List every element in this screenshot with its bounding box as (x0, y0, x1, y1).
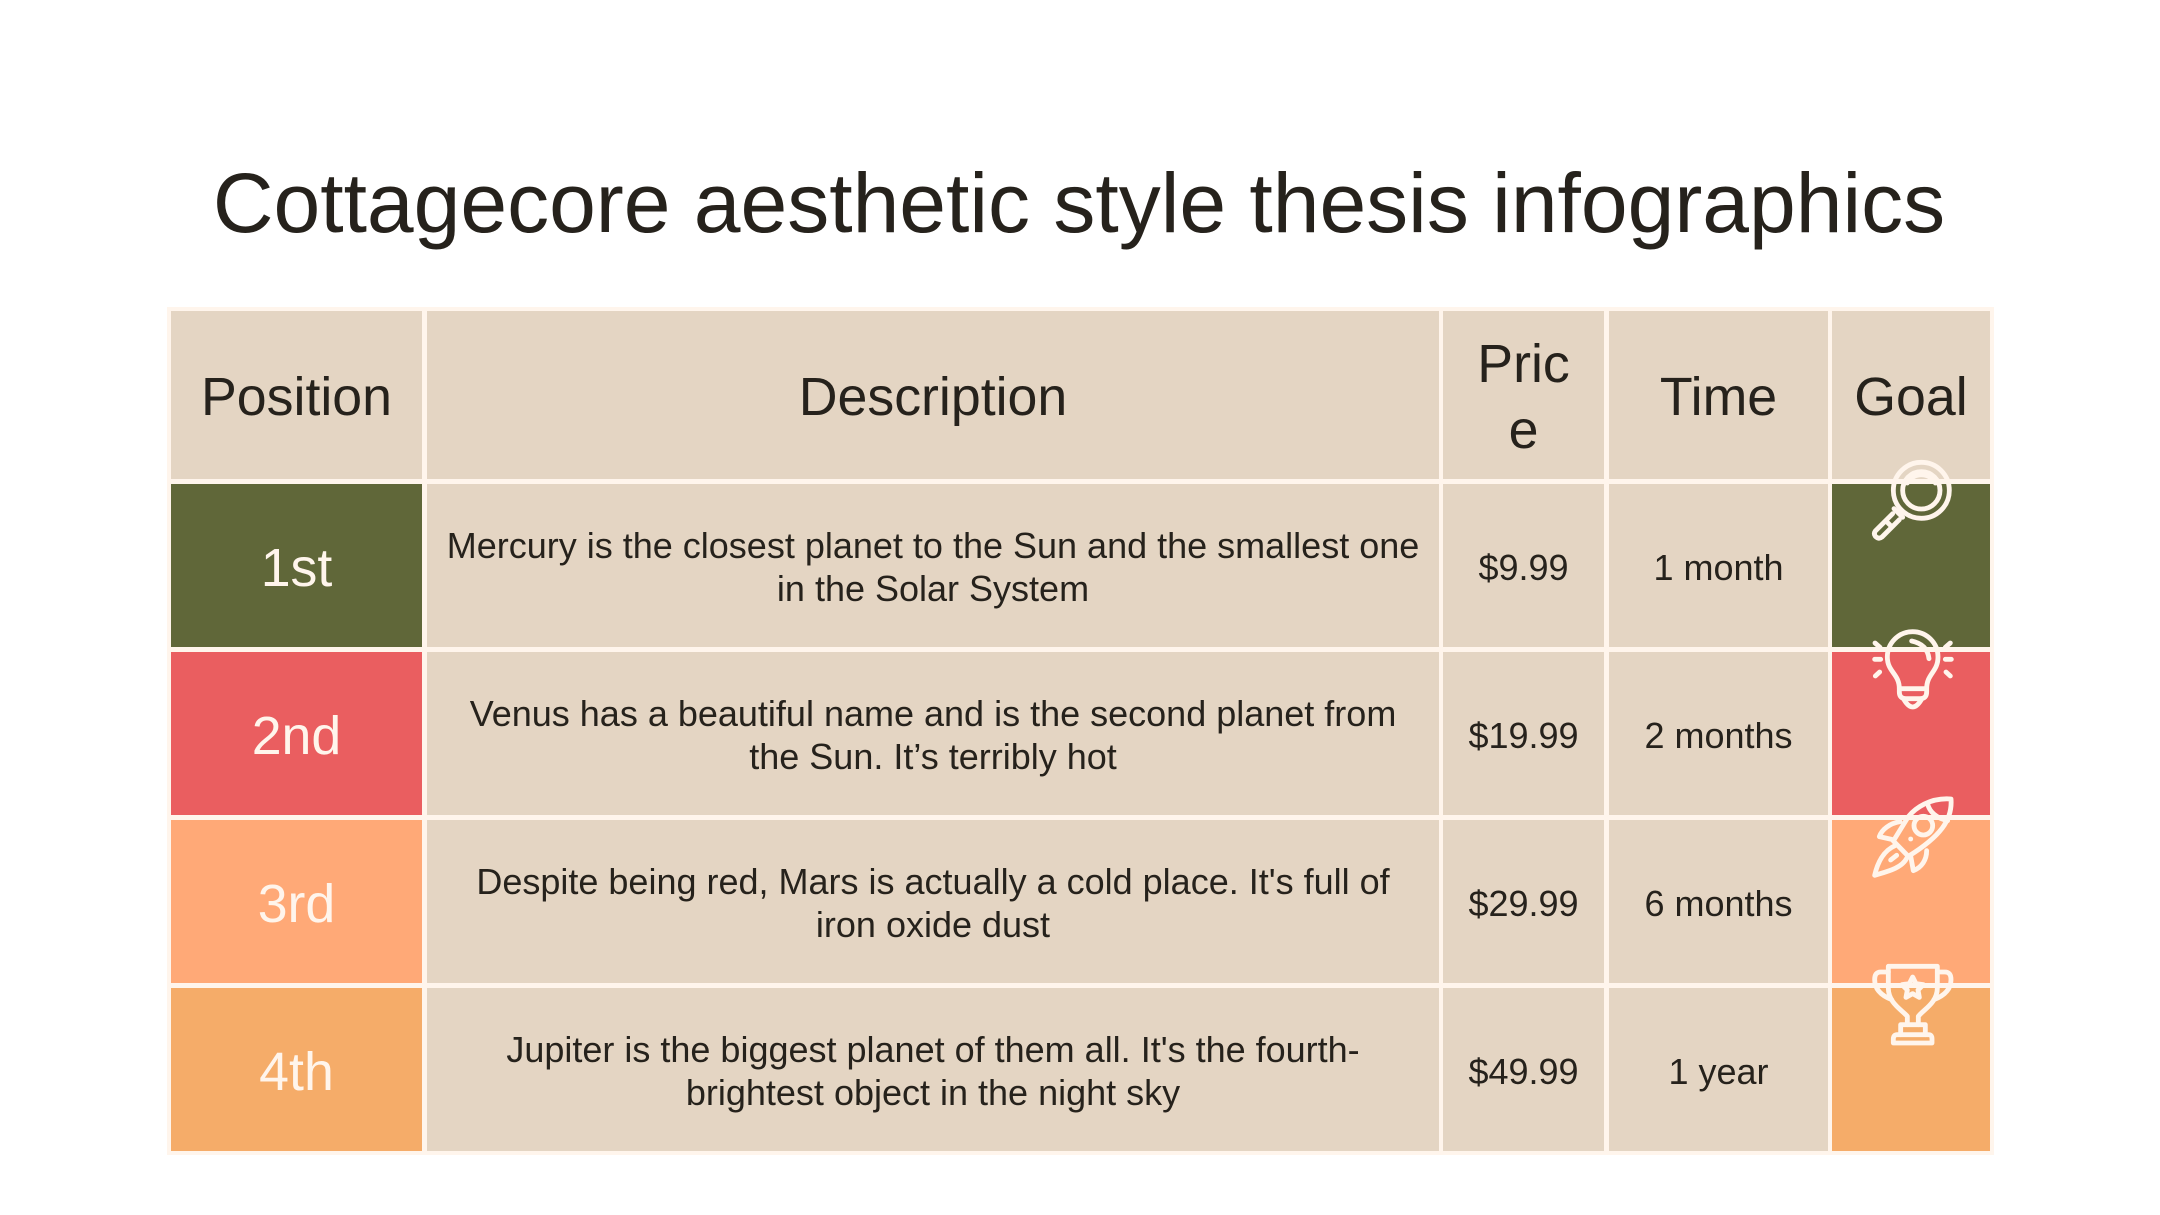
heading: Position: Position (201, 366, 392, 426)
description: Jupiter (427, 988, 1439, 1151)
description: Venus (427, 652, 1439, 815)
description: Mercury: Mercury is the closest planet to the Sun and the smallest one (447, 525, 1419, 566)
heading: Price: e (1509, 400, 1538, 460)
position cell: 1st: 1st (261, 538, 332, 598)
description: Mars: iron oxide dust (816, 904, 1050, 945)
price: $49.99: $49.99 (1468, 1050, 1579, 1092)
price: $9.99 (1443, 484, 1604, 647)
description: Jupiter: brightest object in the night sky (686, 1072, 1180, 1113)
heading: Position (171, 311, 422, 479)
icon: light bulb (1872, 629, 1954, 710)
goal cell: row 1 (1832, 484, 1990, 647)
goal cell: row 3 (1832, 820, 1990, 983)
heading: Goal: Goal (1854, 366, 1968, 426)
time: 1 month (1609, 484, 1828, 647)
heading: Description: Description (799, 366, 1067, 426)
heading: Description (427, 311, 1439, 479)
heading: Price (1443, 311, 1604, 479)
goal cell: row 2 (1832, 652, 1990, 815)
description: Mars: Despite being red, Mars is actually a cold place. It's full of (476, 861, 1390, 902)
price: $19.99: $19.99 (1468, 714, 1579, 756)
panel: pricing table (167, 307, 1994, 1155)
time: 2 months (1609, 652, 1828, 815)
icon: magnifying glass (1872, 460, 1952, 541)
time: 2 months: 2 months (1644, 714, 1793, 756)
position cell: 4th (171, 988, 422, 1151)
position cell: 3rd: 3rd (258, 874, 335, 934)
heading: Goal (1832, 311, 1990, 479)
description: Mars (427, 820, 1439, 983)
time: 6 months: 6 months (1644, 882, 1793, 924)
description: Mercury (427, 484, 1439, 647)
description: Jupiter: Jupiter is the biggest planet of them all. It's the fourth- (506, 1029, 1360, 1070)
heading: Price: Pric (1477, 334, 1570, 394)
time: 1 month: 1 month (1653, 546, 1784, 588)
description: Venus: Venus has a beautiful name and is the second planet from (470, 693, 1396, 734)
icon: trophy (1872, 964, 1954, 1046)
position cell: 1st (171, 484, 422, 647)
position cell: 2nd (171, 652, 422, 815)
time: 1 year: 1 year (1668, 1050, 1769, 1092)
description: Mercury: in the Solar System (777, 568, 1089, 609)
heading: Time: Time (1660, 366, 1777, 426)
price: $9.99: $9.99 (1478, 546, 1569, 588)
position cell: 2nd: 2nd (252, 706, 341, 766)
icon: rocket (1872, 796, 1954, 878)
goal cell: row 4 (1832, 988, 1990, 1151)
time: 6 months (1609, 820, 1828, 983)
price: $49.99 (1443, 988, 1604, 1151)
price: $29.99: $29.99 (1468, 882, 1579, 924)
title: Cottagecore aesthetic style thesis infographics (213, 156, 1945, 250)
time: 1 year (1609, 988, 1828, 1151)
price: $19.99 (1443, 652, 1604, 815)
heading: Time (1609, 311, 1828, 479)
position cell: 4th: 4th (259, 1042, 334, 1102)
price: $29.99 (1443, 820, 1604, 983)
description: Venus: the Sun. It’s terribly hot (749, 736, 1117, 777)
position cell: 3rd (171, 820, 422, 983)
